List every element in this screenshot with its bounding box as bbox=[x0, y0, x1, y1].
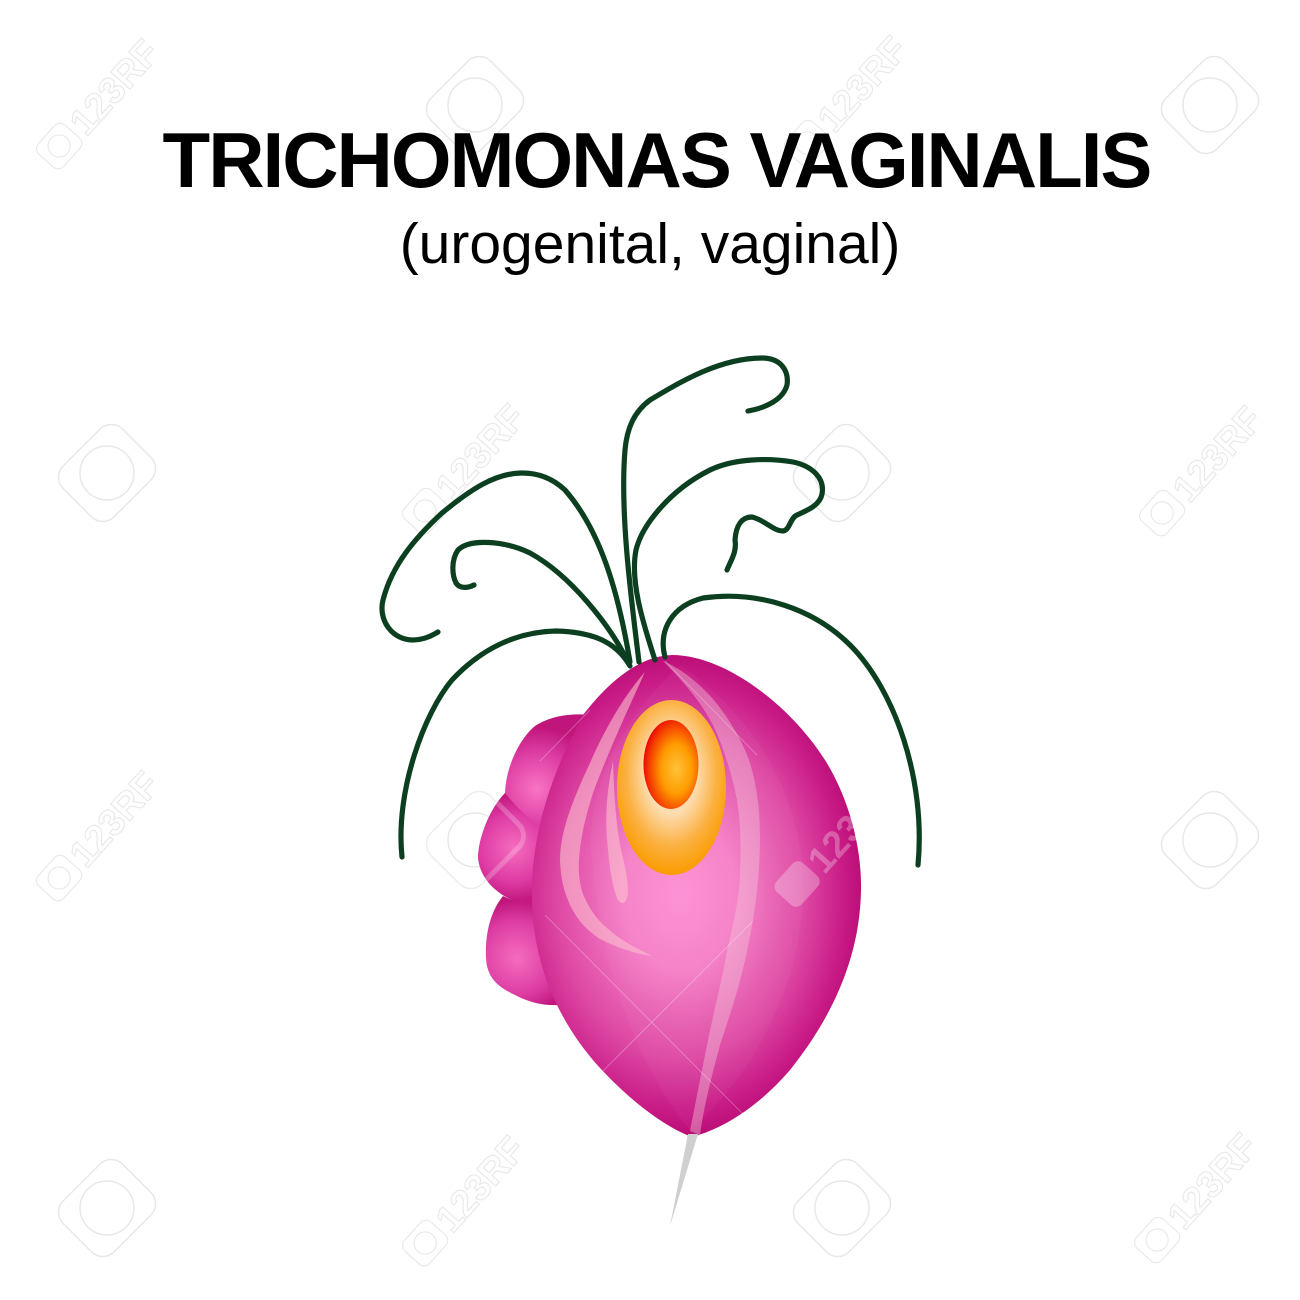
scratch lines bbox=[540, 661, 757, 1114]
highlight: left crescent bbox=[560, 672, 652, 956]
watermark on body bbox=[770, 769, 905, 914]
tail: axostyle tip bbox=[670, 1134, 698, 1226]
highlight: small streak bbox=[606, 761, 628, 903]
watermark on membrane bbox=[420, 785, 530, 895]
nucleolus bbox=[644, 720, 698, 809]
watermark on body: 123RF bbox=[799, 769, 905, 881]
subtitle: (urogenital, vaginal) bbox=[400, 212, 900, 276]
highlight: axostyle bbox=[663, 661, 760, 1135]
title: TRICHOMONAS VAGINALIS bbox=[163, 116, 1150, 204]
flagella bbox=[382, 358, 919, 865]
nucleus bbox=[617, 700, 726, 875]
cell body bbox=[420, 655, 905, 1137]
undulating membrane bbox=[478, 714, 600, 1005]
